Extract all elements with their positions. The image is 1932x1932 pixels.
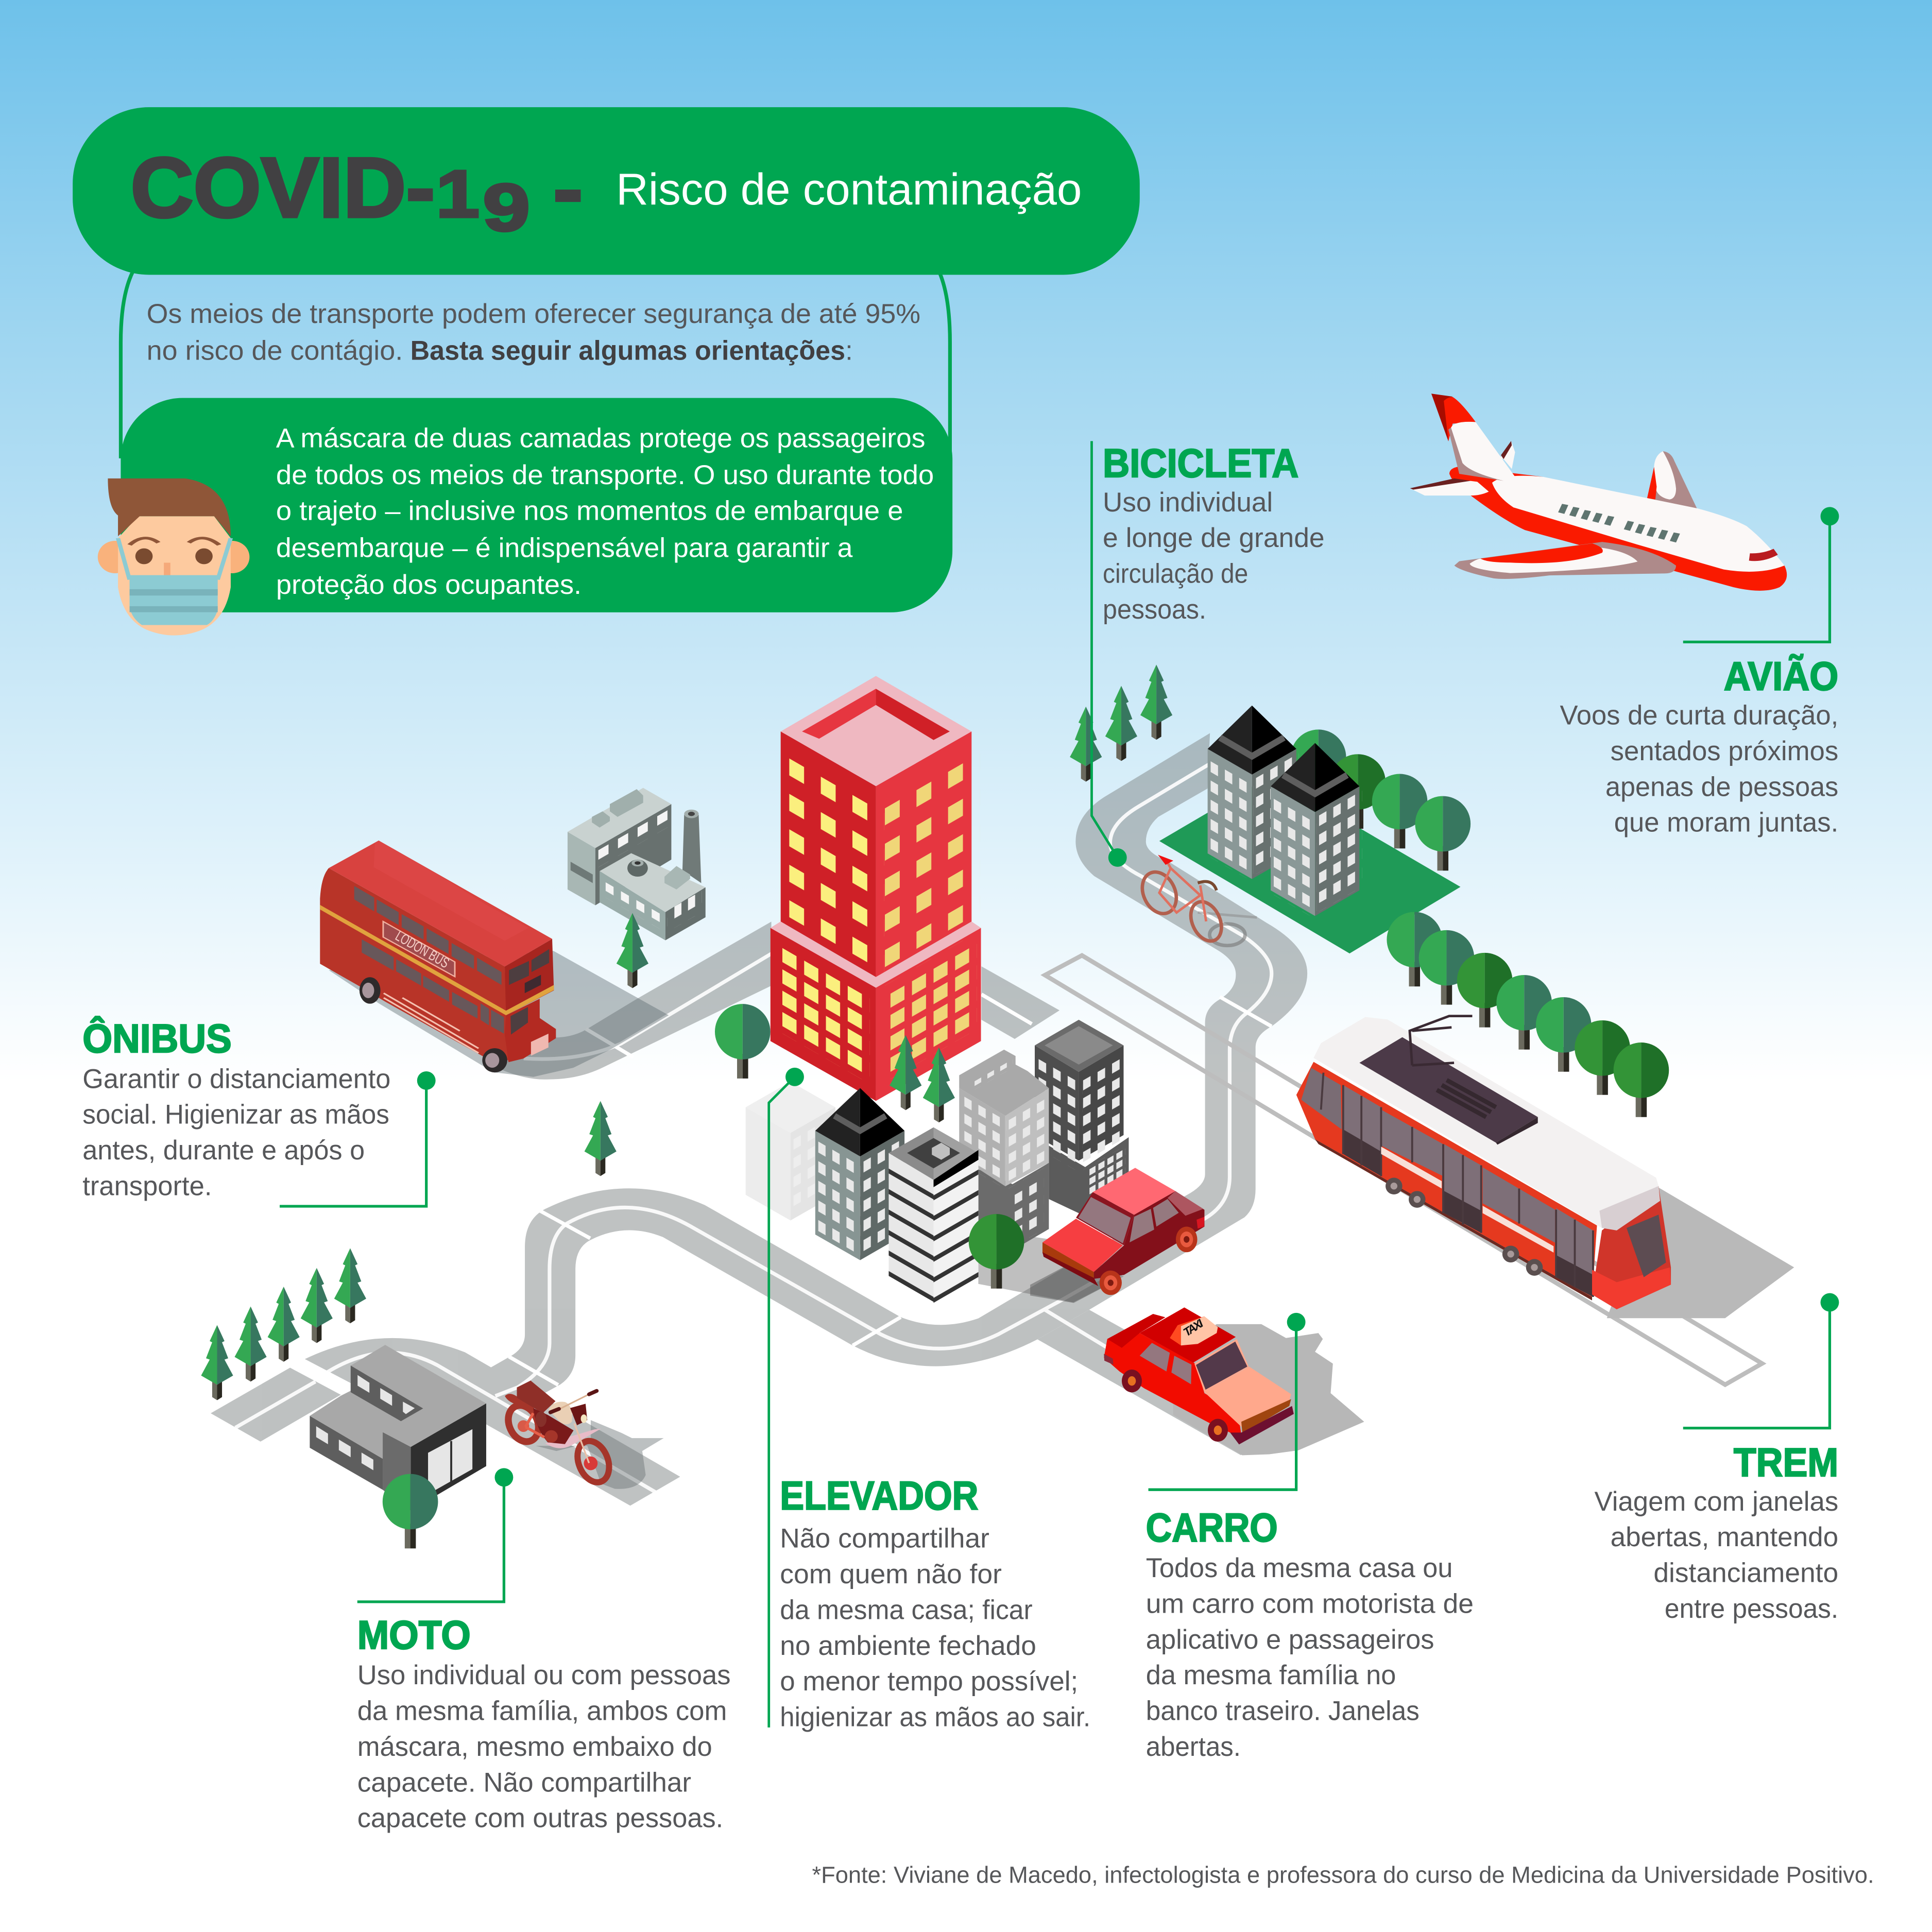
intro outline box (121, 271, 950, 458)
mask panel text: o trajeto – inclusive nos momentos de embarque e (276, 496, 903, 526)
building: striped tower (888, 1127, 979, 1303)
text block: ônibus: ÔNIBUS (82, 1016, 232, 1061)
text block: ônibus (82, 1016, 390, 1201)
intro text: : (845, 336, 853, 366)
title: COVID-19 (131, 140, 583, 245)
shadows on ground (329, 951, 1794, 1455)
callout: bus leader (280, 1071, 436, 1206)
intro text: no risco de contágio. (147, 336, 403, 366)
title: COVID-19: COVID- (131, 140, 435, 235)
mask panel (121, 398, 952, 612)
text block: trem: entre pessoas. (1665, 1594, 1838, 1624)
text block: elevador: no ambiente fechado (780, 1631, 1036, 1661)
building: ghost lighter tower (746, 1082, 836, 1221)
text block: moto: máscara, mesmo embaixo do (357, 1732, 712, 1762)
text block: avião (1560, 654, 1838, 838)
text block: avião: AVIÃO (1724, 654, 1838, 699)
text block: carro: aplicativo e passageiros (1146, 1625, 1434, 1655)
text block: moto: da mesma família, ambos com (357, 1696, 727, 1726)
title: COVID-19: 9 (483, 170, 530, 245)
text block: trem: abertas, mantendo (1611, 1522, 1838, 1552)
mask panel text: proteção dos ocupantes. (276, 570, 582, 600)
text block: avião: apenas de pessoas (1605, 772, 1838, 802)
bus (320, 841, 556, 1072)
text block: bicicleta: pessoas. (1103, 594, 1206, 625)
callout: motorcycle leader (357, 1468, 513, 1602)
text block: trem: TREM (1734, 1441, 1838, 1485)
callout: plane leader (1683, 507, 1839, 642)
lawn with towers (1159, 776, 1460, 953)
text block: avião: que moram juntas. (1614, 808, 1838, 838)
building: dark tower (1035, 1020, 1129, 1216)
mask panel text: A máscara de duas camadas protege os passageiros (276, 423, 926, 453)
text block: carro: abertas. (1146, 1732, 1241, 1762)
mask panel text (276, 423, 934, 600)
text block: moto: capacete. Não compartilhar (357, 1767, 691, 1798)
car (1030, 1168, 1204, 1303)
text block: carro: da mesma família no (1146, 1660, 1396, 1690)
source note: *Fonte: Viviane de Macedo, infectologista e professora do curso de Medicina da Universidade Positivo. (812, 1861, 1874, 1888)
text block: moto: Uso individual ou com pessoas (357, 1660, 731, 1690)
text block: moto: capacete com outras pessoas. (357, 1803, 723, 1834)
text block: ônibus: transporte. (82, 1171, 212, 1201)
motorcycle (503, 1380, 664, 1489)
title banner (73, 107, 1140, 275)
text block: trem: distanciamento (1653, 1558, 1838, 1588)
round trees (715, 912, 1669, 1117)
text block: elevador: o menor tempo possível; (780, 1666, 1078, 1697)
round tree near car (969, 1214, 1024, 1289)
round tree near house (383, 1474, 438, 1548)
text block: ônibus: Garantir o distanciamento (82, 1064, 390, 1094)
airplane (1410, 394, 1787, 591)
text block: elevador: da mesma casa; ficar (780, 1595, 1033, 1625)
text block: carro: Todos da mesma casa ou (1146, 1553, 1452, 1583)
text block: bicicleta: e longe de grande (1103, 523, 1325, 553)
bicycle (1136, 856, 1257, 946)
text block: carro: banco traseiro. Janelas (1146, 1696, 1420, 1726)
text block: elevador: com quem não for (780, 1559, 1002, 1589)
text block: bicicleta: Uso individual (1103, 487, 1273, 518)
taxi sign text: TAXI (1181, 1316, 1206, 1339)
subtitle: Risco de contaminação (616, 165, 1082, 214)
building: pyramid roof tower (815, 1088, 906, 1264)
callout: train leader (1683, 1293, 1839, 1428)
text block: bicicleta (1103, 441, 1325, 625)
callout: car leader (1149, 1313, 1306, 1490)
text block: moto (357, 1613, 731, 1834)
intro text (147, 299, 920, 366)
callout: elevator leader (769, 1068, 804, 1728)
text block: carro: CARRO (1146, 1506, 1278, 1550)
building: light gray tower (959, 1050, 1051, 1251)
text block: elevador (780, 1474, 1090, 1732)
icon: face with mask (98, 478, 249, 636)
text block: elevador: ELEVADOR (780, 1474, 978, 1518)
text block: trem (1595, 1441, 1838, 1624)
house (310, 1345, 486, 1511)
intro text: Os meios de transporte podem oferecer segurança de até 95% (147, 299, 920, 329)
title: COVID-19: - (553, 144, 583, 234)
pine trees (201, 664, 1172, 1400)
text block: avião: sentados próximos (1611, 736, 1838, 766)
taxi (1104, 1307, 1294, 1444)
text block: avião: Voos de curta duração, (1560, 700, 1838, 731)
text block: moto: MOTO (357, 1613, 471, 1657)
intro text: Basta seguir algumas orientações (411, 336, 845, 366)
train track (1045, 955, 1762, 1384)
text block: trem: Viagem com janelas (1595, 1486, 1838, 1517)
text block: bicicleta: circulação de (1103, 559, 1248, 589)
callout: bicycle leader (1092, 441, 1127, 867)
building: factory (568, 788, 706, 941)
building: red tower (771, 676, 981, 1101)
tram (1296, 1016, 1671, 1309)
title: COVID-19: 1 (436, 157, 480, 231)
round trees behind towers (1291, 729, 1471, 870)
text block: bicicleta: BICICLETA (1103, 441, 1298, 486)
roads (211, 733, 1307, 1506)
text block: ônibus: antes, durante e após o (82, 1135, 365, 1166)
text block: elevador: Não compartilhar (780, 1524, 989, 1554)
mask panel text: desembarque – é indispensável para garantir a (276, 533, 853, 563)
text block: ônibus: social. Higienizar as mãos (82, 1100, 389, 1130)
text block: carro: um carro com motorista de (1146, 1588, 1474, 1619)
bus sign text: LODON BUS (392, 928, 452, 971)
mask panel text: de todos os meios de transporte. O uso durante todo (276, 460, 934, 490)
black roof towers on lawn (1208, 706, 1362, 919)
text block: carro (1146, 1506, 1474, 1762)
text block: elevador: higienizar as mãos ao sair. (780, 1702, 1090, 1732)
